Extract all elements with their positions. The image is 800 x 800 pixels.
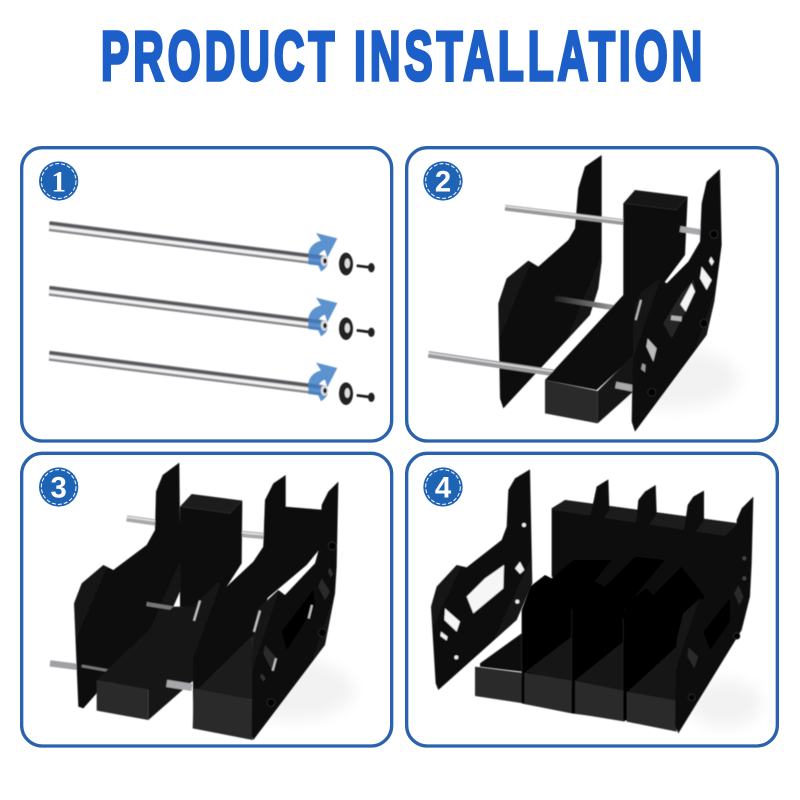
- step badge 1: [39, 161, 78, 201]
- step badge 2: [423, 161, 463, 201]
- panel 4: completed rack with end plate: [407, 453, 777, 746]
- assembly: [50, 463, 338, 740]
- step badge 2: 2: [435, 166, 451, 199]
- step badge 4: 4: [435, 472, 452, 505]
- rod 3 with washer and screw: [49, 353, 375, 405]
- panel 2: foam and side plates: [407, 148, 777, 441]
- assembly: [428, 155, 722, 432]
- step badge 4: [423, 467, 463, 507]
- rod 2 with washer and screw: [49, 288, 375, 340]
- panel 1: rods and screws: [22, 148, 392, 441]
- step badge 3: 3: [51, 472, 67, 505]
- title: PRODUCT INSTALLATION: [101, 18, 706, 96]
- step badge 3: [39, 467, 78, 507]
- panel 3: second foam block added: [22, 453, 392, 746]
- rod 1 with washer and screw: [49, 223, 375, 275]
- detached end plate: [431, 469, 532, 690]
- step badge 1: 1: [51, 166, 66, 198]
- rack body: [475, 479, 753, 733]
